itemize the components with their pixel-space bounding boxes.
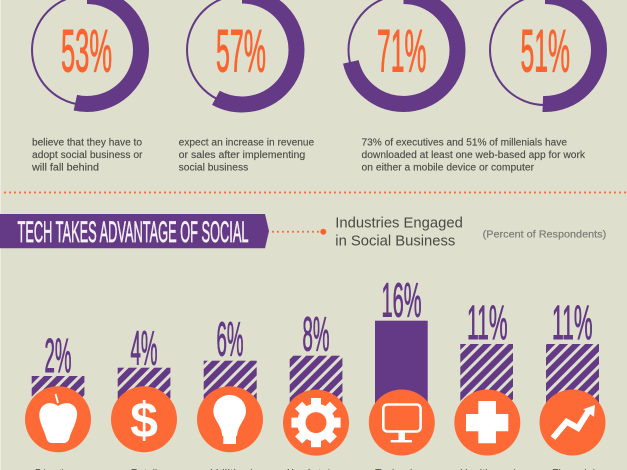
text block: 53% caption: believe that they have to [32,138,142,148]
text block: 53% caption: will fall behind [31,162,99,174]
bar: technology 16% [369,274,435,470]
bar: manufacturing 8% [283,309,349,470]
donut: 51% [490,0,600,105]
text block: 57% caption: social business [179,162,248,174]
text block: 53% caption [31,138,143,174]
text block: executives caption: on either a mobile device or computer [362,162,535,174]
text: TECH TAKES ADVANTAGE OF SOCIAL [18,216,248,249]
text block: executives caption: 73% of executives and 51% of millenials have [362,138,567,148]
donut: 71%: 71% [377,18,426,84]
bar: retail 4%: $ [130,392,158,448]
bar: education 2% [25,330,91,470]
bar: education 2%: 2% [44,330,72,383]
donut: 57% [187,0,297,105]
text block: 57% caption: or sales after implementing [179,150,305,161]
subtitle: industries engaged: Industries Engaged [335,216,463,232]
bar: retail 4% [111,323,177,470]
bar chart: industries [25,274,606,470]
connector: banner to subtitle [273,229,326,235]
bar: financial 11% [540,297,606,470]
donut: 53% [32,0,142,105]
donut: 71% [348,0,458,105]
text block: 53% caption: adopt social business or [32,150,143,161]
note: percent of respondents: (Percent of Respondents) [483,228,606,240]
text block: executives caption: downloaded at least one web-based app for work [362,150,586,161]
bar: utilities 6% [197,313,263,470]
bar: healthcare 11% [454,297,520,470]
bar: healthcare 11%: 11% [467,297,508,350]
subtitle: industries engaged [335,216,463,250]
heading: banner [0,214,269,249]
donut: 53%: 53% [61,18,112,84]
bar: technology 16%: 16% [382,274,422,327]
text block: 57% caption [179,138,315,174]
text block: executives caption [362,138,586,174]
bar: utilities 6%: 6% [216,313,244,366]
donut: 57%: 57% [216,18,266,84]
bar: retail 4%: 4% [130,323,158,376]
text block: 57% caption: expect an increase in revenue [179,138,315,148]
bar: manufacturing 8%: 8% [302,309,330,362]
subtitle: industries engaged: in Social Business [335,234,455,250]
panel: donut statistics [32,0,600,105]
